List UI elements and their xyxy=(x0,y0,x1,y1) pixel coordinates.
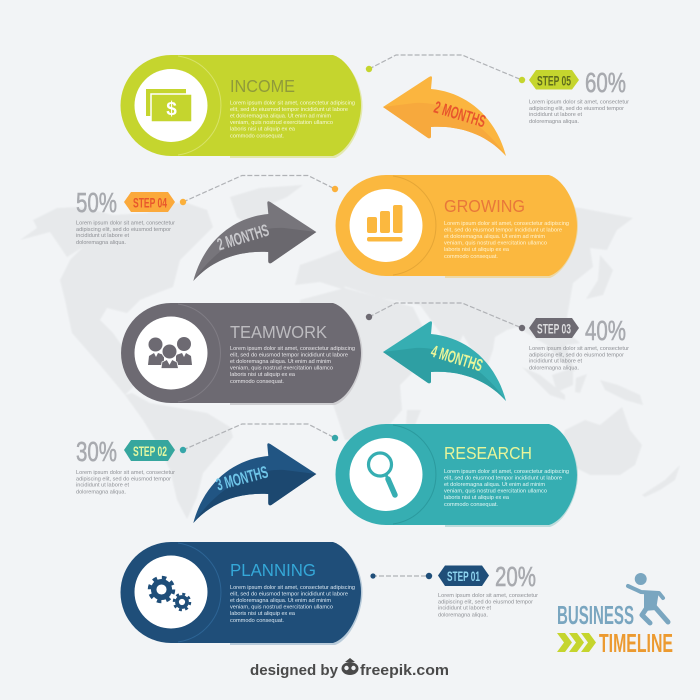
body text: commodo consequat. xyxy=(444,502,498,508)
description: incididunt ut labore et xyxy=(76,233,129,239)
percent: 60% xyxy=(585,67,626,98)
panel: income xyxy=(120,55,362,158)
percent: 30% xyxy=(76,436,117,467)
description: Lorem ipsum dolor sit amet, consectetur xyxy=(529,100,629,106)
icon ring edge xyxy=(393,425,436,524)
body text: commodo consequat. xyxy=(230,379,284,385)
description: adipiscing elit, sed do eiusmod tempor xyxy=(438,599,533,605)
icon: running figure xyxy=(628,573,668,623)
description: Lorem ipsum dolor sit amet, consectetur xyxy=(76,470,175,476)
arrow: 2 months gray: 2 MONTHS xyxy=(215,221,271,254)
heading: RESEARCH xyxy=(444,443,532,463)
body text: laboris nisi ut aliquip ex ea xyxy=(230,372,296,378)
connector: step 01 xyxy=(370,573,432,579)
icon: gears xyxy=(150,578,190,610)
icon: freepik logo xyxy=(342,658,358,675)
description: adipiscing elit, sed do eiusmod tempor xyxy=(76,476,171,482)
body text: et doloremagna aliqua. Ut enim ad minim xyxy=(230,359,331,365)
description: doloremagna aliqua. xyxy=(438,612,488,618)
body text: elit, sed do eiusmod tempor incididunt ut labore xyxy=(230,107,348,113)
body text: laboris nisi ut aliquip ex ea xyxy=(230,611,296,617)
connector: step 03 xyxy=(366,303,525,331)
description: Lorem ipsum dolor sit amet, consectetur xyxy=(438,593,538,599)
description: Lorem ipsum dolor sit amet, consectetur xyxy=(76,220,175,226)
description xyxy=(76,470,175,495)
icon disc xyxy=(134,316,208,390)
icon disc xyxy=(134,556,208,628)
pill shape xyxy=(336,175,577,276)
arrow: 3 months navy: 3 MONTHS xyxy=(214,462,270,495)
description xyxy=(438,593,538,618)
body text: Lorem ipsum dolor sit amet, consectetur adipiscing xyxy=(230,100,355,106)
description xyxy=(529,346,629,371)
tag: STEP 05 xyxy=(537,72,571,88)
footer credit xyxy=(250,658,449,679)
panel: planning xyxy=(120,542,362,645)
icon ring edge xyxy=(178,56,221,155)
icon ring edge xyxy=(178,543,221,642)
step 04 block xyxy=(76,187,175,246)
step 01 block xyxy=(438,561,538,618)
heading: INCOME xyxy=(230,76,295,96)
body text: commodo consequat. xyxy=(230,133,284,139)
heading: TEAMWORK xyxy=(230,322,327,342)
percent: 50% xyxy=(76,187,117,218)
tag: STEP 01 xyxy=(447,568,480,584)
body text: Lorem ipsum dolor sit amet, consectetur adipiscing xyxy=(444,469,569,475)
icon: team xyxy=(148,337,192,368)
pill shape xyxy=(120,542,361,643)
arrow: 2 months orange xyxy=(383,76,506,156)
body text: veniam, quis nostrud exercitation ullamco xyxy=(230,366,333,372)
arrow: 3 months navy xyxy=(193,443,316,523)
body text: commodo consequat. xyxy=(444,254,498,260)
connector: step 04 xyxy=(180,176,338,205)
arrow: 2 months orange: 2 MONTHS xyxy=(432,98,488,131)
body text: veniam, quis nostrud exercitation ullamco xyxy=(230,604,333,610)
tag: STEP 02 xyxy=(133,443,167,459)
icon disc xyxy=(350,189,422,262)
icon: money xyxy=(146,89,192,122)
heading: PLANNING xyxy=(230,560,316,580)
icon: bar chart xyxy=(367,205,402,242)
tag: STEP 03 xyxy=(537,320,571,336)
world map background xyxy=(20,185,680,519)
description: incididunt ut labore et xyxy=(529,112,582,118)
body text: elit, sed do eiusmod tempor incididunt ut labore xyxy=(230,352,348,358)
step 02 block xyxy=(76,436,175,495)
icon ring edge xyxy=(178,304,220,402)
icon: magnifier xyxy=(368,453,395,495)
percent: 20% xyxy=(495,561,536,592)
body text: veniam, quis nostrud exercitation ullamco xyxy=(444,240,547,246)
body text: et doloremagna aliqua. Ut enim ad minim xyxy=(444,234,545,240)
body text: veniam, quis nostrud exercitation ullamco xyxy=(230,120,333,126)
body text: et doloremagna aliqua. Ut enim ad minim xyxy=(230,114,331,120)
body text: laboris nisi ut aliquip ex ea xyxy=(444,495,510,501)
body text: elit, sed do eiusmod tempor incididunt ut labore xyxy=(230,592,348,598)
body text: Lorem ipsum dolor sit amet, consectetur adipiscing xyxy=(444,221,569,227)
pill shape xyxy=(336,424,577,525)
body text: commodo consequat. xyxy=(230,618,284,624)
body text: et doloremagna aliqua. Ut enim ad minim xyxy=(444,482,545,488)
description: Lorem ipsum dolor sit amet, consectetur xyxy=(529,346,629,352)
panel: research xyxy=(336,424,578,527)
step 05 block xyxy=(529,67,629,125)
icon disc xyxy=(350,438,422,511)
panel: teamwork xyxy=(121,303,362,405)
connector: step 05 xyxy=(366,55,525,83)
heading: GROWING xyxy=(444,196,525,216)
body text: laboris nisi ut aliquip ex ea xyxy=(444,247,510,253)
description: adipiscing elit, sed do eiusmod tempor xyxy=(529,352,624,358)
description: doloremagna aliqua. xyxy=(529,119,579,125)
footer credit: designed by xyxy=(250,662,339,679)
body text xyxy=(230,585,355,624)
icon: money: $ xyxy=(166,99,177,120)
panel: growing xyxy=(336,175,578,278)
body text: elit, sed do eiusmod tempor incididunt ut labore xyxy=(444,476,562,482)
percent: 40% xyxy=(585,315,626,346)
description xyxy=(76,220,175,246)
icon disc xyxy=(134,69,208,142)
description: adipiscing elit, sed do eiusmod tempor xyxy=(529,106,624,112)
tag: STEP 04 xyxy=(133,194,167,210)
description: doloremagna aliqua. xyxy=(76,240,126,246)
description: doloremagna aliqua. xyxy=(76,489,126,495)
body text xyxy=(230,346,355,385)
arrow: 4 months teal xyxy=(383,321,506,401)
body text: elit, sed do eiusmod tempor incididunt ut labore xyxy=(444,228,562,234)
pill shape xyxy=(120,55,361,156)
body text: Lorem ipsum dolor sit amet, consectetur adipiscing xyxy=(230,346,355,352)
step 03 block xyxy=(529,315,629,371)
body text xyxy=(230,100,355,139)
description: doloremagna aliqua. xyxy=(529,365,579,371)
body text: laboris nisi ut aliquip ex ea xyxy=(230,127,296,133)
description: incididunt ut labore et xyxy=(438,606,491,612)
business timeline logo xyxy=(557,573,673,658)
icon ring edge xyxy=(393,176,436,275)
footer credit: freepik.com xyxy=(360,662,449,679)
body text: veniam, quis nostrud exercitation ullamco xyxy=(444,488,547,494)
description: adipiscing elit, sed do eiusmod tempor xyxy=(76,227,171,233)
body text xyxy=(444,221,569,260)
body text: et doloremagna aliqua. Ut enim ad minim xyxy=(230,598,331,604)
body text: Lorem ipsum dolor sit amet, consectetur adipiscing xyxy=(230,585,355,591)
pill shape xyxy=(121,303,361,403)
icon: chevrons xyxy=(557,633,596,652)
heading: business: BUSINESS xyxy=(557,600,634,630)
body text xyxy=(444,469,569,508)
description: incididunt ut labore et xyxy=(529,359,582,365)
description xyxy=(529,100,629,125)
connector: step 02 xyxy=(180,424,338,453)
arrow: 4 months teal: 4 MONTHS xyxy=(429,342,485,375)
description: incididunt ut labore et xyxy=(76,483,129,489)
arrow: 2 months gray xyxy=(193,201,316,281)
